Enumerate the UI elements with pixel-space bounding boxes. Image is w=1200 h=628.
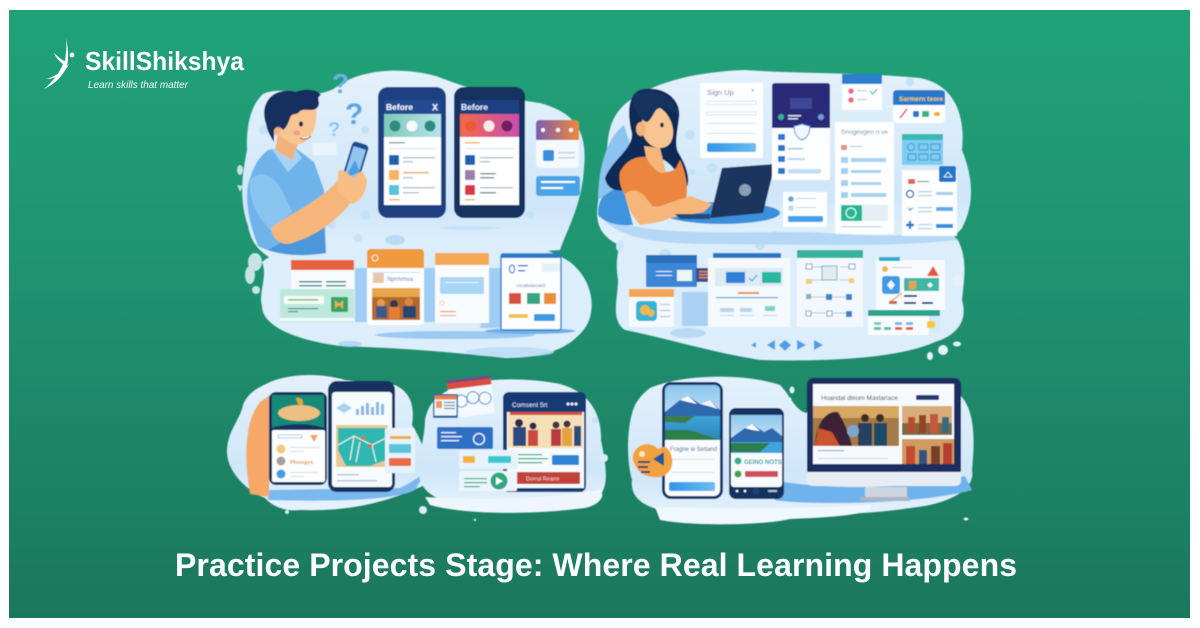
lower-left card: orange form card bbox=[435, 253, 489, 323]
card: purple security card bbox=[772, 83, 830, 180]
tablet header dots bbox=[566, 402, 578, 406]
sign up button bbox=[707, 143, 756, 152]
right blob accents bbox=[616, 78, 964, 360]
monitor: marketplace page bbox=[807, 378, 961, 486]
lower-left card: picture article: Nprmmva bbox=[387, 277, 414, 283]
stripes chip bbox=[696, 268, 712, 282]
card: teal grid bbox=[902, 134, 943, 165]
phone heading: Before bbox=[461, 102, 488, 112]
logo wordmark: SkillShikshya bbox=[85, 46, 244, 76]
blue text card bbox=[437, 427, 493, 449]
ear bbox=[636, 122, 646, 136]
shield icon bbox=[794, 124, 810, 140]
card: calendar bbox=[629, 289, 674, 327]
illustration: map and travel phone app bbox=[227, 375, 608, 521]
question marks bbox=[328, 68, 363, 141]
shirt bbox=[247, 146, 326, 255]
blue wash strip bbox=[600, 216, 958, 245]
blob accents bbox=[237, 125, 554, 357]
white foam bottom bbox=[425, 490, 602, 513]
lower-left card: dashboard bbox=[485, 254, 575, 334]
colour tiles bbox=[509, 293, 556, 304]
blob: lower-right background bbox=[616, 234, 964, 360]
calendar doodle card bbox=[447, 375, 495, 418]
small floating envelope card bbox=[312, 142, 337, 156]
character: man with phone bbox=[247, 90, 369, 255]
row of blue arrows bbox=[751, 340, 823, 351]
list heading lines bbox=[389, 142, 405, 144]
splash droplets bbox=[285, 417, 608, 521]
card: small action card bbox=[783, 192, 827, 227]
close icon: × bbox=[751, 88, 755, 94]
shirt shading bbox=[268, 205, 326, 255]
eye bbox=[660, 123, 664, 127]
neck bbox=[644, 146, 666, 173]
floating card: green play bbox=[459, 471, 517, 491]
neck bbox=[275, 134, 298, 160]
orange phone caption: Phoogys bbox=[290, 460, 313, 466]
tablet: event listing bbox=[503, 392, 586, 492]
lower-left card: dashboard: Vocabularoard bbox=[516, 283, 546, 288]
blob: top-left background bbox=[242, 71, 585, 268]
blue shade between cards bbox=[355, 268, 501, 328]
tool icons bbox=[900, 109, 940, 118]
phone: shopping app bbox=[269, 392, 327, 485]
blue water wash bbox=[770, 476, 972, 503]
card: flow diagram bbox=[797, 250, 863, 327]
character: woman at laptop bbox=[605, 89, 712, 225]
chair bbox=[598, 183, 633, 225]
illustration: before/after mobile redesign project bbox=[237, 68, 592, 358]
logo bbox=[44, 38, 244, 91]
laptop bbox=[675, 164, 775, 219]
side speech bubble bbox=[536, 176, 580, 196]
hand holding phone bbox=[246, 395, 270, 497]
landscape picture bbox=[665, 385, 720, 440]
illustration: landscape phones and marketplace monitor bbox=[628, 377, 974, 524]
tablet header: Comsent 5rt bbox=[512, 402, 548, 409]
hair front bbox=[633, 90, 679, 122]
blob: bottom-right background bbox=[628, 377, 974, 521]
card: chart screen bbox=[708, 253, 790, 327]
small orange list card bbox=[433, 394, 458, 418]
blob: top-right background bbox=[597, 70, 971, 250]
card: sign up form bbox=[700, 83, 763, 158]
close icon: X bbox=[432, 102, 438, 112]
main photo bbox=[813, 406, 899, 446]
card: table with teal header bbox=[868, 310, 940, 335]
floating card: buttons bbox=[459, 450, 517, 469]
card: small status list bbox=[842, 74, 882, 110]
pie illustration bbox=[278, 398, 320, 421]
question mark large: ? bbox=[332, 68, 349, 99]
teal band with icons bbox=[384, 114, 441, 137]
list rows bbox=[778, 134, 785, 174]
sleeve bbox=[250, 175, 292, 230]
phone heading: Before bbox=[386, 102, 413, 112]
pink band with icons bbox=[460, 114, 519, 137]
question mark small: ? bbox=[328, 119, 340, 141]
hair bbox=[264, 90, 321, 142]
forearm bbox=[271, 176, 360, 244]
collar bbox=[271, 146, 302, 172]
phone button bbox=[669, 482, 715, 491]
title: Practice Projects Stage: Where Real Learning Happens bbox=[175, 547, 1017, 583]
phone: landscape form bbox=[662, 382, 723, 499]
card: icon list bbox=[902, 166, 957, 236]
logo tagline: Learn skills that matter bbox=[88, 79, 188, 91]
card: tools with yellow title bbox=[893, 90, 945, 123]
phone: booking bbox=[729, 408, 784, 499]
phone caption: Fragne w Setland bbox=[670, 447, 717, 453]
chart strip bbox=[336, 402, 384, 415]
blue left patch bbox=[598, 125, 640, 200]
card: blue patch under calendar side bbox=[682, 292, 708, 326]
small landscape bbox=[731, 415, 782, 453]
phone header bbox=[460, 100, 519, 114]
lower-left card: orange header with mint panel bbox=[280, 260, 354, 322]
hand bbox=[338, 170, 367, 204]
tools card title: Sarmern txore bbox=[899, 96, 943, 103]
pop-up card bbox=[385, 428, 415, 473]
sign up heading: Sign Up bbox=[707, 88, 734, 97]
question mark middle: ? bbox=[345, 98, 363, 131]
tablet red banner: Dorrut Rearre bbox=[526, 476, 560, 482]
card: blue browser window bbox=[646, 255, 712, 287]
lower-left card: picture article bbox=[367, 249, 424, 325]
cheek bbox=[294, 130, 300, 136]
monitor page title: Hoandal dleom Maxlarlace bbox=[821, 395, 898, 402]
checklist bbox=[465, 155, 513, 200]
card: process with warning triangle bbox=[876, 257, 945, 310]
card: checklist panel bbox=[835, 122, 894, 234]
side card with checkbox bbox=[536, 120, 579, 168]
booking label: GEINO NOTS bbox=[744, 460, 782, 466]
face bbox=[641, 106, 673, 148]
side photo bottom bbox=[902, 439, 954, 464]
monitor stand bbox=[860, 487, 910, 501]
blob: tablet group background bbox=[419, 379, 606, 510]
phone: map app bbox=[328, 381, 415, 492]
smile bbox=[300, 136, 311, 139]
eye bbox=[299, 121, 303, 127]
orange butterfly icon bbox=[633, 444, 672, 477]
checklist bbox=[389, 155, 435, 200]
top bbox=[619, 157, 687, 207]
checklist panel title: Snogevgen n ve bbox=[841, 129, 888, 136]
list heading lines bbox=[465, 142, 480, 144]
illustration: web app screens with woman at laptop bbox=[597, 70, 971, 360]
monitor page button bbox=[916, 395, 939, 400]
side photo top bbox=[902, 406, 952, 435]
white foam strip bbox=[655, 505, 871, 524]
phone: before version one bbox=[378, 87, 446, 218]
blob: lower-left background bbox=[261, 237, 592, 358]
blue lower wash bbox=[268, 470, 427, 501]
face bbox=[274, 104, 317, 144]
event photo bbox=[508, 412, 583, 448]
arm bbox=[625, 191, 712, 225]
map bbox=[336, 425, 388, 467]
desk shadow bbox=[664, 202, 780, 224]
ear bbox=[271, 121, 281, 135]
mint panel bbox=[280, 289, 354, 322]
phone in hand bbox=[340, 141, 369, 190]
photo bbox=[372, 288, 420, 320]
long hair back bbox=[605, 89, 688, 191]
phone: before version two bbox=[454, 87, 525, 218]
phone header bbox=[384, 100, 441, 114]
page caption bbox=[818, 450, 844, 451]
droplets bbox=[788, 386, 968, 520]
icon: logo swoosh figure bbox=[44, 38, 74, 89]
blob: bottom-left background bbox=[227, 375, 428, 510]
